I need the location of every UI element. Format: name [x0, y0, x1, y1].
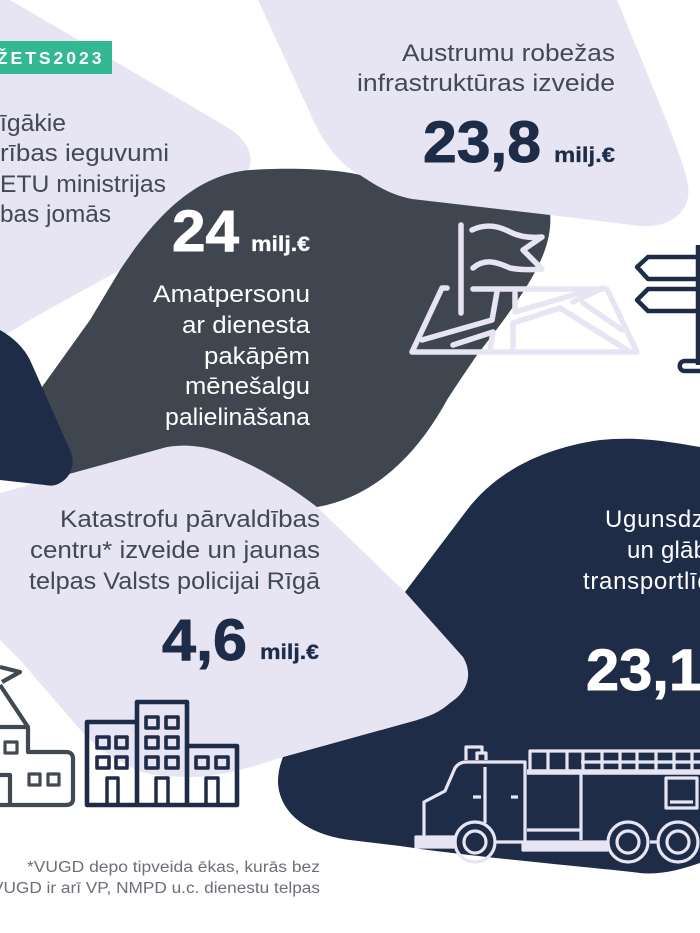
panel: top-left lavender blob [0, 0, 251, 338]
icon: signpost [637, 245, 700, 371]
text block: salaries: pakāpēm [204, 343, 310, 370]
footnote: *VUGD depo tipveida ēkas, kurās bez [27, 859, 320, 876]
text block: salaries: palielināšana [165, 404, 311, 431]
panel: dark grey salaries blob [42, 169, 550, 520]
text block: disaster management centres: Katastrofu pārvaldības [60, 506, 320, 533]
panel: top-right lavender blob [258, 0, 688, 226]
heading: intro text: īgākie [0, 110, 66, 137]
panel: bottom lavender blob [0, 446, 468, 777]
number: 24 million euro: 24 [172, 199, 239, 264]
footnote [0, 859, 320, 897]
heading: intro text [0, 110, 169, 228]
number: 24 million euro: milj.€ [251, 233, 310, 256]
number: 4,6 million euro: milj.€ [260, 641, 319, 664]
panel: left navy blob [0, 330, 73, 486]
text block: salaries [153, 281, 311, 431]
text block: eastern border: Austrumu robežas [402, 40, 615, 67]
icon: flag on map [412, 225, 637, 352]
number: 23,8 million euro: 23,8 [423, 110, 541, 175]
number: 23,1 million euro: 23,1 [586, 638, 700, 703]
text block: salaries: Amatpersonu [153, 281, 310, 308]
text block: salaries: ar dienesta [182, 312, 311, 339]
panel: right navy blob [278, 439, 700, 873]
text block: eastern border [357, 40, 615, 97]
number: 4,6 million euro: 4,6 [162, 608, 247, 673]
footnote: VUGD ir arī VP, NMPD u.c. dienestu telpas [0, 880, 320, 897]
icon: city buildings [87, 702, 237, 805]
number: 24 million euro [172, 199, 310, 264]
number: 4,6 million euro [162, 608, 319, 673]
text block: eastern border: infrastruktūras izveide [357, 70, 615, 97]
number: 23,8 million euro: milj.€ [554, 144, 615, 167]
text block: fire and rescue vehicles [583, 506, 700, 595]
badge: budget 2023 [0, 41, 112, 74]
number: 23,8 million euro [423, 110, 615, 175]
heading: intro text: bas jomās [0, 201, 111, 228]
heading: intro text: rības ieguvumi [0, 140, 169, 167]
text block: disaster management centres: telpas Valsts policijai Rīgā [29, 568, 321, 595]
text block: salaries: mēnešalgu [185, 373, 310, 400]
text block: disaster management centres [29, 506, 321, 595]
heading: intro text: ETU ministrijas [0, 171, 166, 198]
text block: disaster management centres: centru* izveide un jaunas [30, 537, 320, 564]
icon: school building [0, 667, 73, 805]
icon: fire truck [416, 747, 700, 862]
